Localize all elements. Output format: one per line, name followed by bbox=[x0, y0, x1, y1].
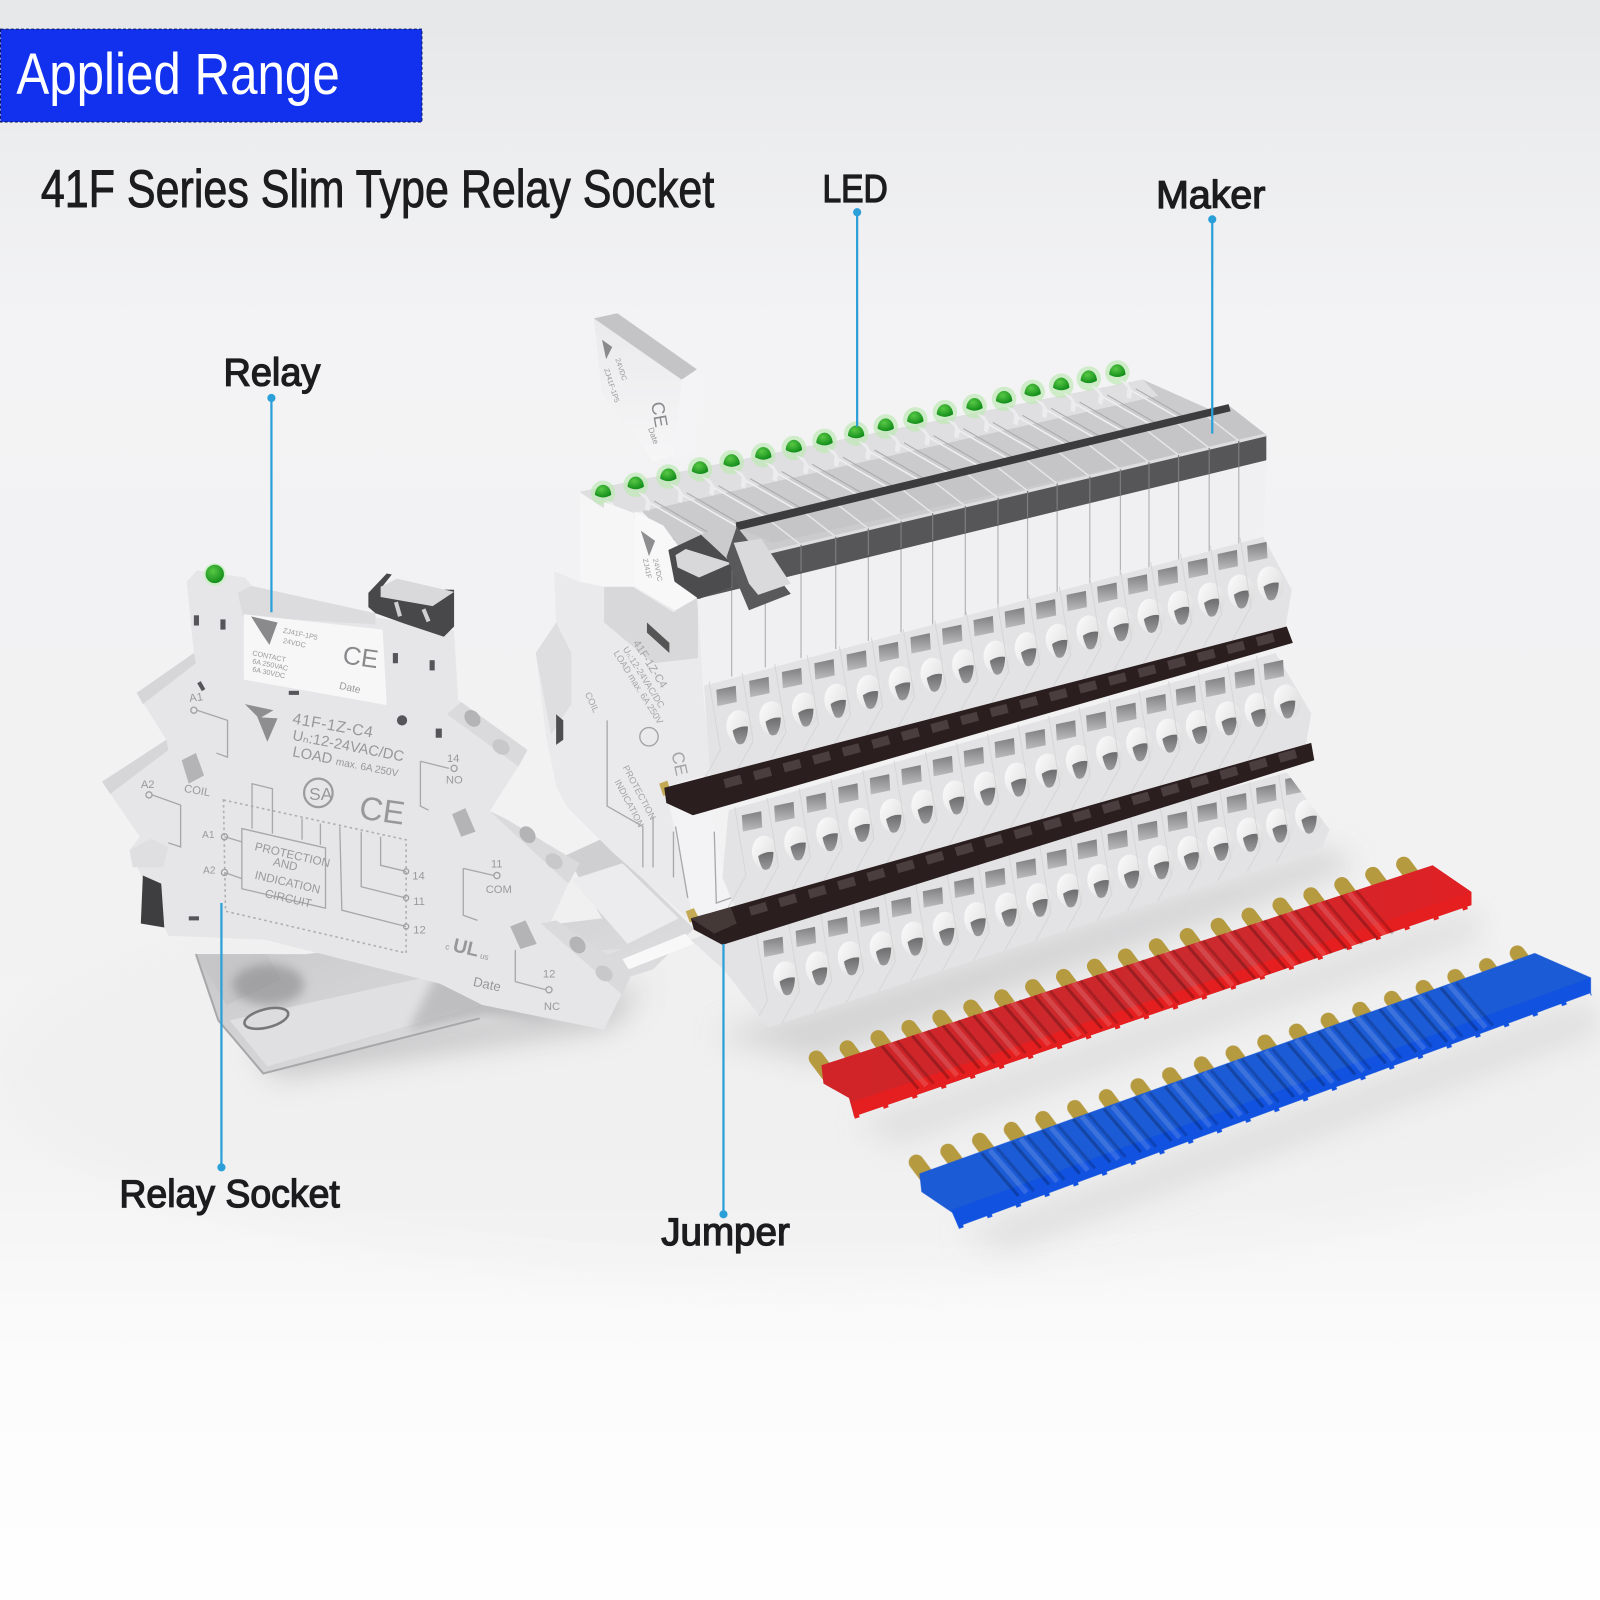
wiring diagram: A1 bbox=[189, 691, 204, 705]
callout: LED bbox=[822, 168, 888, 427]
certification marks: SA bbox=[309, 784, 333, 804]
certification marks: c bbox=[444, 942, 450, 952]
wiring diagram: 14 bbox=[447, 753, 459, 765]
callout: Jumper: Jumper bbox=[661, 1211, 790, 1254]
terminal row 2 bbox=[722, 653, 1311, 913]
model text: 41F-1Z-C4 bbox=[291, 711, 375, 742]
certification marks: UL bbox=[451, 934, 481, 962]
slots bbox=[189, 615, 442, 920]
relay label bbox=[244, 614, 387, 705]
jumper 1 (black) bbox=[659, 627, 1293, 815]
terminal wings bbox=[102, 653, 633, 995]
DIN rail bbox=[196, 839, 694, 1073]
relay label: 24VDC bbox=[282, 637, 306, 650]
end plate: 41F-1Z-C4 bbox=[630, 638, 669, 690]
callout: Relay Socket: Relay Socket bbox=[119, 1173, 340, 1216]
LED row bbox=[591, 360, 1189, 542]
wiring diagram: A1 bbox=[202, 830, 215, 841]
relay label: 6A 30VDC bbox=[252, 666, 286, 680]
blue jumper bbox=[916, 953, 1591, 1227]
pulled relay bbox=[604, 502, 699, 610]
wiring diagram: CIRCUIT bbox=[264, 887, 313, 911]
strip body bbox=[821, 865, 1471, 1116]
relay label: 6A 250VAC bbox=[252, 657, 289, 673]
wiring diagram: NC bbox=[544, 1001, 560, 1013]
gold pins bbox=[916, 953, 1530, 1179]
banner: Applied Range bbox=[1, 29, 422, 122]
gold pins bbox=[816, 864, 1416, 1074]
logo bbox=[245, 704, 278, 742]
end plate: CE bbox=[668, 750, 692, 777]
wiring diagram: A2 bbox=[203, 865, 216, 876]
red jumper bbox=[816, 864, 1471, 1116]
relay socket (single unit) bbox=[102, 563, 633, 1030]
detached relay: CE bbox=[647, 400, 672, 429]
end plate: COIL bbox=[583, 690, 601, 714]
wiring diagram: 11 bbox=[413, 896, 425, 908]
shadows under products bbox=[255, 847, 1600, 1250]
relay top surface bbox=[580, 380, 1266, 569]
end plate: LOAD max. 6A 250V bbox=[612, 649, 665, 727]
model text: Uₙ:12-24VAC/DC bbox=[291, 728, 406, 765]
ridges bbox=[882, 891, 1393, 1089]
certification marks: Date bbox=[472, 974, 502, 994]
pulled relay: ZJ41F bbox=[641, 558, 653, 580]
callout: Jumper bbox=[661, 944, 790, 1254]
end plate: PROTECTION bbox=[621, 764, 658, 821]
marker strip bbox=[697, 404, 1266, 599]
wiring diagram: 12 bbox=[543, 969, 555, 981]
relay front panels bbox=[697, 460, 1266, 692]
wiring diagram: NO bbox=[446, 775, 463, 787]
detached relay: Date bbox=[646, 426, 661, 446]
LED bbox=[204, 563, 226, 586]
wiring diagram: COIL bbox=[183, 783, 211, 799]
end plate: COM bbox=[729, 858, 743, 881]
relay label: Date bbox=[338, 681, 362, 696]
wiring diagram bbox=[141, 691, 560, 1013]
socket body bbox=[102, 570, 633, 1030]
callout: LED: LED bbox=[822, 168, 888, 211]
certification marks: CE bbox=[357, 789, 407, 832]
detached relay: ZJ41F-1P5 bbox=[602, 368, 621, 404]
callout: Maker bbox=[1156, 174, 1265, 434]
callout: Maker: Maker bbox=[1156, 174, 1265, 217]
wiring diagram: A2 bbox=[141, 779, 155, 791]
callout: Relay bbox=[223, 352, 321, 612]
relay socket bank (assembled) bbox=[536, 360, 1330, 1038]
detached relay: 24VDC bbox=[613, 357, 628, 382]
terminal row 1 bbox=[700, 537, 1292, 796]
marker clip bbox=[368, 573, 454, 637]
pulled relay: 24VDC bbox=[651, 558, 664, 582]
strip body bbox=[919, 953, 1591, 1227]
left clip bbox=[141, 876, 164, 928]
end plate: INDICATION bbox=[613, 778, 646, 829]
wiring diagram: PROTECTION bbox=[253, 840, 331, 870]
callout: Relay Socket bbox=[119, 903, 340, 1216]
jumper 2 (black) bbox=[686, 743, 1314, 945]
detached relay bbox=[594, 313, 697, 461]
banner: Applied Range: Applied Range bbox=[16, 42, 340, 107]
terminal row 3 bbox=[691, 771, 1330, 1038]
relay label: ZJ41F-1P5 bbox=[282, 627, 318, 642]
wiring diagram: 14 bbox=[412, 871, 425, 883]
relay label: CE bbox=[341, 641, 380, 674]
relay label: CONTACT bbox=[252, 649, 287, 664]
wiring diagram: INDICATION bbox=[253, 869, 321, 897]
wiring diagram: AND bbox=[272, 856, 299, 874]
relay top band bbox=[238, 586, 376, 624]
certification marks bbox=[304, 779, 502, 994]
ridges bbox=[982, 983, 1493, 1196]
callout: Relay: Relay bbox=[223, 352, 321, 395]
wiring diagram: 12 bbox=[413, 925, 426, 937]
marker end clips bbox=[668, 527, 791, 610]
model text bbox=[291, 711, 406, 781]
title: 41F Series Slim Type Relay Socket bbox=[41, 160, 714, 219]
model text: LOAD max. 6A 250V bbox=[291, 744, 400, 781]
wiring diagram: COM bbox=[486, 884, 512, 896]
certification marks: us bbox=[479, 951, 490, 962]
wiring diagram: 11 bbox=[491, 858, 502, 870]
terminal clips bbox=[182, 753, 537, 949]
end plate: Uₙ:12-24VAC/DC bbox=[621, 645, 667, 710]
end plate bbox=[536, 492, 743, 923]
